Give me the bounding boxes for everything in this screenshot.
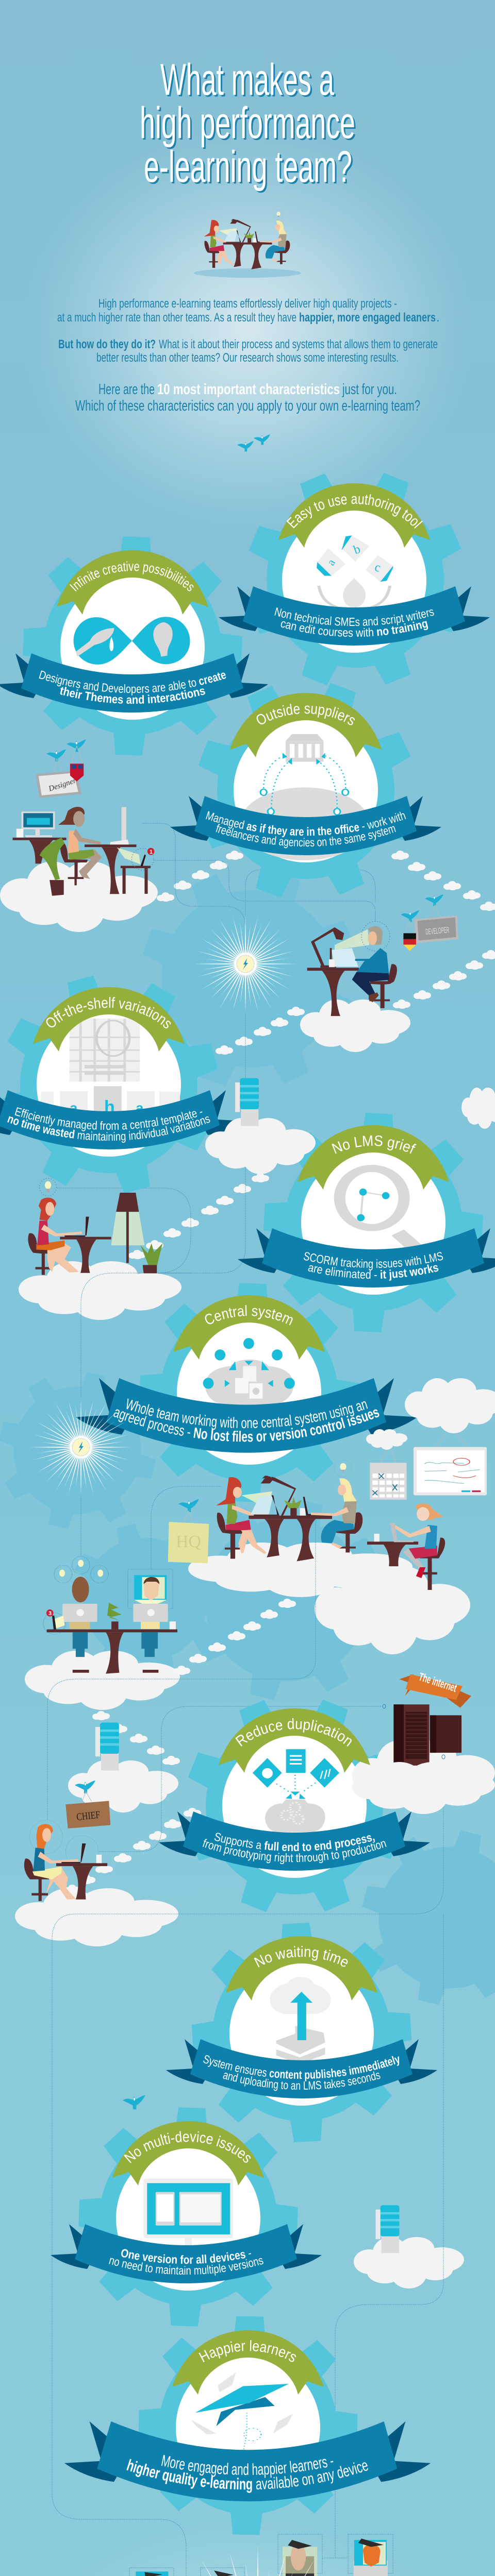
egg [176,2355,320,2500]
panel: Off-the-shelf variations [0,976,233,1193]
panel: No waiting time [166,1923,437,2142]
arch heading: Reduce duplication [235,1718,352,1747]
icon: template grid with variation tiles: h [104,1097,115,1117]
banner line 1: Designers and Developers are able to create [39,670,226,696]
front cloud over servers [352,1762,495,1814]
scene: learners at desks [119,2556,397,2576]
gear [137,2314,359,2537]
gear [187,1918,417,2147]
green arch [33,987,185,1052]
icon: two birds [237,434,270,451]
arch heading: No LMS grief [332,1136,417,1154]
green arch [112,2121,264,2185]
egg [60,575,205,720]
arch heading: No waiting time [254,1946,348,1968]
scene: chief woman at desk [24,1820,107,1901]
panel: Happier learners [64,2316,431,2535]
sign: CHIEF [65,1781,110,1828]
bottom glow [0,2514,495,2576]
intro text: . [436,311,440,325]
banner line 2: can edit courses with no training [280,621,428,637]
top glow [21,124,474,536]
blue banner [76,1378,417,1453]
green arch [173,1295,325,1360]
icon: letter tiles and person: b [352,543,362,557]
blue banner [170,796,441,855]
banner line 1: Efficiently managed from a central template - [14,1107,202,1131]
green arch [57,550,208,615]
panel: Central system [75,1283,417,1502]
egg [116,2146,260,2291]
scene: designer at desk on cloud: Designer [47,776,77,793]
banner line 1: Supports a full end to end process, [214,1833,375,1852]
server towers with internet ribbon: The internet [417,1670,459,1694]
banner line 1: Non technical SMEs and script writers [274,607,434,626]
icon: documents feeding head with gears [253,1749,339,1832]
banner line 1: SCORM tracking issues with LMS [303,1252,443,1270]
icon: infinity with brush and bulb [74,617,190,665]
server cloud [352,1740,495,1814]
scene: developer at desk on cloud: DEVELOPER [425,926,450,937]
title: e-learning team? [144,142,352,192]
banner line 2: are eliminated - it just works [308,1264,438,1281]
icon: monitor with phone and tablet [144,2179,233,2246]
arch heading: Central system [205,1305,293,1325]
icon: letter tiles and person [317,535,393,607]
banner line 1: Managed as if they are in the office - work with [206,811,406,838]
egg [229,1961,374,2106]
call to action text: just for you. [342,381,397,398]
call to action text [75,381,420,414]
banner line 2: agreed process - No lost files or version control issues [113,1410,380,1442]
water cooler [235,1078,259,1126]
intro text: happier, more engaged leaners [299,311,436,325]
gear [166,650,446,930]
arch heading: Off-the-shelf variations [46,997,171,1028]
hero illustration: two women at a desk [194,210,301,278]
scene: HQ women [216,1460,362,1562]
egg [37,1012,181,1157]
scene: two men at a shared desk: 3 [48,1611,52,1617]
arch heading: Happier learners [199,2340,296,2363]
banner line 2: no need to maintain multiple versions [109,2258,263,2276]
scene: two men at a shared desk [43,1556,177,1674]
blue banner [166,2039,437,2098]
scene: woman with ponytail at laptop [367,1503,445,1590]
gear [258,1108,488,1337]
call to action text: Here are the [98,381,155,398]
scene: HQ sign and bird: HQ [176,1532,201,1551]
gear [0,951,243,1218]
burst: final lightning idea [141,2540,375,2576]
arch heading: Easy to use authoring tool [287,494,423,529]
burst: lightning idea 1 [192,911,299,1017]
arch heading: Infinite creative possibilities [70,561,194,591]
gear [213,437,495,721]
blue banner [219,586,490,646]
egg [301,1150,446,1295]
blue banner [64,2421,431,2501]
green arch [298,1125,449,1190]
egg [234,718,378,862]
banner line 1: Whole team working with one central system using an [127,1398,368,1430]
icon: letter tiles and person: a [324,557,338,568]
background gears [0,839,495,2024]
panel: Infinite creative possibilities [0,536,268,756]
blue banner [0,1090,244,1149]
green arch [172,2330,324,2395]
dotted connector lines [47,823,443,2576]
scene: developer at desk on cloud [307,894,458,1016]
icon: template grid with variation tiles: a [136,1100,144,1116]
blue banner [51,2224,322,2283]
water cooler 3 [376,2205,399,2253]
icon: letter tiles and person: c [373,561,382,575]
blue banner [0,653,268,713]
title: What makes a [160,55,334,105]
learner heads and video panels [136,2538,388,2576]
blue banner [238,1228,495,1287]
banner line 2: their Themes and interactions [60,687,205,704]
icon: upload arrow from stack to cloud [270,1977,331,2064]
icon: template grid with variation tiles [41,1019,180,1117]
egg [177,1320,321,1465]
title: e-learning team? [145,144,354,193]
banner line 1: More engaged and happier learners - [161,2455,333,2478]
whiteboard and calendar [370,1433,487,1500]
banner line 2: and uploading to an LMS takes seconds [223,2071,381,2091]
green arch [219,1708,370,1773]
banner line 1: System ensures content publishes immediately [203,2055,399,2081]
call to action text: 10 most important characteristics [157,381,340,398]
cooler cloud [205,1118,316,1174]
green arch [278,483,430,548]
icon: graduation cap and paper darts [191,2372,293,2450]
icon: building, globe and dotted arcs [240,734,369,860]
burst: lightning idea 2 [28,1394,134,1500]
sign: CHIEF: CHIEF [76,1809,101,1823]
green arch [226,1936,377,2001]
icon: template grid with variation tiles: a [70,1100,78,1116]
banner line 2: no time wasted maintaining individual variations [7,1116,210,1143]
cloud trails [63,851,495,1894]
title [140,55,357,193]
top right cloud [405,1378,495,1433]
scene: designer at desk on cloud: 1 [150,849,153,855]
scene: designer at desk on cloud [12,740,154,896]
scene: HQ sign and bird [168,1499,209,1563]
small cloud [366,1429,407,1450]
server towers with internet ribbon [383,1670,471,1766]
icon: magnifier with nodes [340,1168,424,1252]
panel: Reduce duplication [159,1699,495,1912]
intro text [57,297,440,365]
banner line 2: freelancers and agencies on the same system [216,824,396,848]
arch heading: Outside suppliers [257,704,355,725]
banner line 2: from prototyping right through to production [203,1839,387,1864]
intro text: at a much higher rate than other teams. As a result they have [57,311,296,325]
title: high performance [140,98,355,148]
panel: No multi-device issues [51,2107,322,2327]
green arch [230,693,382,757]
gear [20,533,245,759]
scene: woman with floor lamp [28,1178,162,1275]
banner line 2: higher quality e-learning available on any device [126,2459,368,2493]
title: high performance [141,100,357,149]
gear [136,1280,362,1505]
blue banner [159,1811,430,1871]
title: What makes a [162,57,336,106]
panel: No LMS grief [205,1113,495,1332]
intro text: But how do they do it? [58,337,156,351]
gear [152,1664,437,1948]
clouds: large platforms [0,861,495,2289]
icon: cloud with documents [203,1338,295,1404]
egg [222,1734,367,1878]
gear [75,2104,301,2330]
water cooler 2 [95,1723,119,1771]
arch heading: No multi-device issues [124,2131,251,2163]
egg [282,509,426,653]
panel: Easy to use authoring tool [219,473,490,685]
panel: Outside suppliers [170,683,441,897]
bird [123,2095,145,2109]
banner line 1: One version for all devices - [121,2249,251,2264]
